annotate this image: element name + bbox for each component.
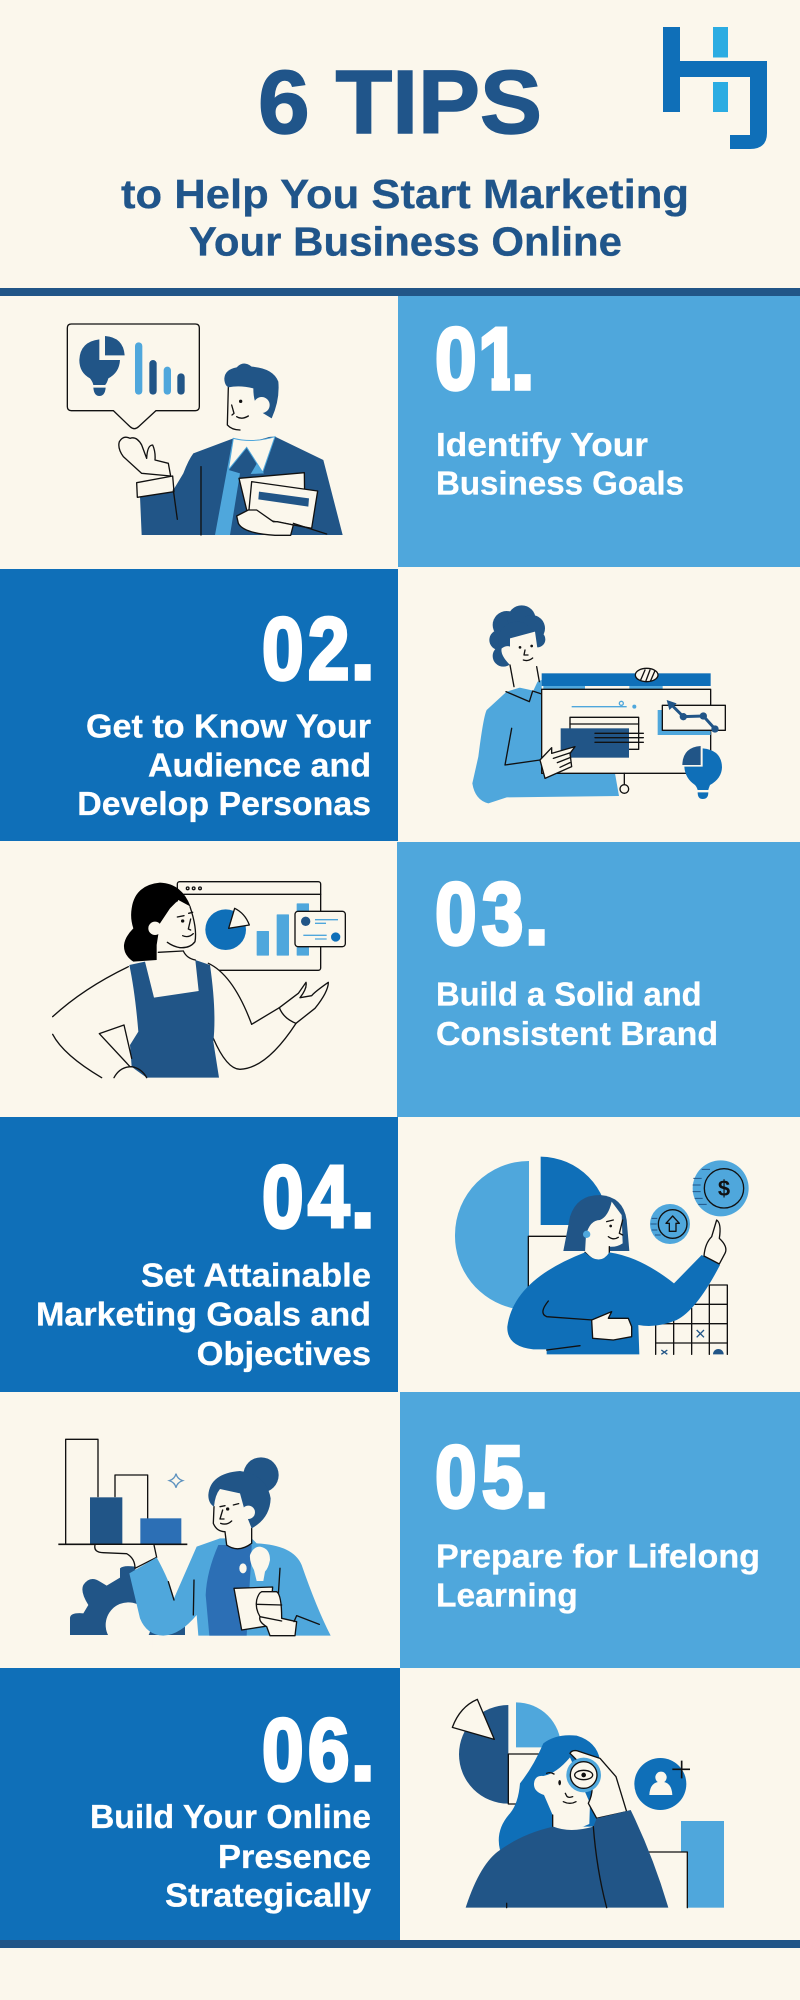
panel: tip 2 <box>0 569 725 841</box>
bar chart <box>257 903 309 956</box>
hair <box>489 605 545 667</box>
header <box>0 27 800 296</box>
bun <box>243 1457 279 1493</box>
tip 5 text <box>436 1538 760 1614</box>
hair <box>499 1735 600 1850</box>
tip 5 text: Learning <box>436 1577 578 1614</box>
calendar grid <box>656 1285 727 1354</box>
tip 3 text: Consistent Brand <box>436 1015 718 1052</box>
apron <box>129 960 219 1078</box>
tip 4 text: Set Attainable <box>141 1257 371 1294</box>
subtitle <box>121 171 689 264</box>
open hand <box>279 982 328 1023</box>
bar <box>633 1821 724 1908</box>
hand holding documents <box>237 510 293 535</box>
subtitle: to Help You Start Marketing <box>121 171 689 217</box>
ear <box>148 922 162 935</box>
tip 1 number: 1 <box>478 310 520 408</box>
hand under tray <box>95 1545 157 1568</box>
tip 1 text: Identify Your <box>436 426 648 463</box>
tip 4 text: Marketing Goals and <box>36 1296 371 1333</box>
head <box>227 387 272 440</box>
dollar coin <box>693 1160 749 1216</box>
document block <box>561 717 643 758</box>
open hand <box>119 437 171 476</box>
tip 4 text <box>36 1257 371 1372</box>
tip 1 text: Business Goals <box>436 464 684 502</box>
tip 1 card <box>398 296 800 567</box>
tip 6 number: 06 <box>262 1701 350 1799</box>
panel: tip 3 <box>53 842 800 1117</box>
hand on chest <box>592 1312 632 1340</box>
face <box>534 1757 590 1829</box>
tip 1 number: 0 <box>435 310 477 408</box>
illustration: woman with coins <box>455 1157 749 1354</box>
lightbulb badge <box>239 1547 270 1581</box>
pie chart <box>455 1157 608 1308</box>
earring <box>583 1231 590 1238</box>
ear <box>254 397 270 413</box>
hand on board <box>635 668 658 682</box>
line chart card <box>658 700 725 735</box>
hand on cup <box>256 1592 297 1636</box>
top divider <box>0 288 800 296</box>
mini bar chart <box>135 342 185 395</box>
hair <box>124 883 191 962</box>
face details <box>158 907 196 960</box>
tip 4 number: . <box>350 1147 375 1246</box>
head <box>145 900 200 968</box>
suit <box>140 437 343 535</box>
gear <box>70 1566 185 1649</box>
coat <box>129 1538 331 1636</box>
tip 3 text <box>436 976 718 1052</box>
dollar coin: $ <box>718 1176 730 1201</box>
slider <box>572 701 636 709</box>
pie chart <box>205 908 249 950</box>
shirt <box>206 1545 252 1636</box>
tip 3 card <box>397 842 800 1117</box>
sleeve line <box>505 728 540 765</box>
tip 1 text <box>436 426 684 502</box>
tip 6 text: Strategically <box>165 1877 372 1914</box>
illustration: woman with dashboard <box>53 882 345 1078</box>
shirt <box>472 680 619 803</box>
tip 3 text: Build a Solid and <box>436 976 702 1013</box>
magnifier <box>566 1758 601 1792</box>
illustration: woman holding chart <box>58 1439 331 1649</box>
hair <box>208 1471 271 1528</box>
sweater <box>507 1252 720 1354</box>
panel: tip 1 <box>67 296 800 567</box>
tip 2 number: 02 <box>262 600 350 698</box>
tip 2 text <box>77 707 371 822</box>
stand <box>622 773 626 785</box>
data card <box>295 911 345 947</box>
tip 6 number: . <box>350 1700 375 1799</box>
tip 1 number <box>435 309 535 408</box>
tip 6 text: Build Your Online <box>90 1798 371 1835</box>
tip 4 card <box>0 1117 398 1392</box>
head <box>501 632 540 691</box>
hand <box>570 1751 627 1818</box>
tip 6 text <box>90 1798 372 1914</box>
icon: user circle <box>634 1758 690 1810</box>
icon: pie lightbulb <box>79 336 125 396</box>
tip 2 text: Develop Personas <box>77 785 371 822</box>
tip 6 card <box>0 1668 400 1940</box>
illustration: man with speech bubble <box>67 324 343 535</box>
title: 6 TIPS <box>258 53 542 153</box>
body outline <box>53 963 296 1078</box>
neck and head <box>213 1489 252 1549</box>
vest <box>215 439 240 535</box>
pointing hand <box>540 747 575 778</box>
tip 3 number: . <box>524 864 549 963</box>
board top bar <box>542 673 711 689</box>
hair <box>224 363 279 418</box>
illustration: woman with magnifier <box>452 1699 724 1908</box>
shirt collar <box>228 437 275 472</box>
tip 4 number: 04 <box>262 1148 350 1246</box>
shirt cuff <box>137 476 174 497</box>
tip 2 number: . <box>350 599 375 698</box>
bar chart <box>58 1439 187 1544</box>
subtitle: Your Business Online <box>189 218 622 264</box>
illustration: man at presentation board <box>472 605 725 803</box>
tip 1 number: . <box>510 309 535 408</box>
panel: tip 6 <box>0 1668 724 1940</box>
tip 5 text: Prepare for Lifelong <box>436 1538 760 1575</box>
tip 5 number: . <box>524 1427 549 1526</box>
browser window <box>177 882 321 970</box>
tip 2 text: Get to Know Your <box>86 707 371 744</box>
hand on hip <box>99 1025 147 1078</box>
icon: sparkle <box>169 1474 183 1488</box>
arrow coin <box>650 1204 690 1244</box>
presentation board <box>542 689 711 773</box>
tip 5 number: 05 <box>435 1428 523 1526</box>
pie chart <box>452 1699 561 1804</box>
cup <box>234 1587 273 1630</box>
icon: pie lightbulb <box>682 746 722 799</box>
pointing hand <box>704 1220 726 1264</box>
tip 4 text: Objectives <box>197 1335 371 1372</box>
tip 2 text: Audience and <box>148 747 371 784</box>
panel: tip 4 <box>0 1117 749 1392</box>
head <box>585 1202 623 1263</box>
tip 3 number: 03 <box>435 865 523 963</box>
ear <box>242 1506 255 1519</box>
collar <box>506 691 542 702</box>
documents <box>239 473 318 528</box>
logo <box>663 27 767 149</box>
hair <box>563 1195 629 1251</box>
panel: tip 5 <box>58 1392 800 1668</box>
tip 6 text: Presence <box>218 1838 371 1875</box>
tip 5 card <box>400 1392 800 1668</box>
bottom divider <box>0 1940 800 1948</box>
speech bubble <box>67 324 199 429</box>
tip 2 card <box>0 569 398 841</box>
sweater <box>466 1810 668 1908</box>
